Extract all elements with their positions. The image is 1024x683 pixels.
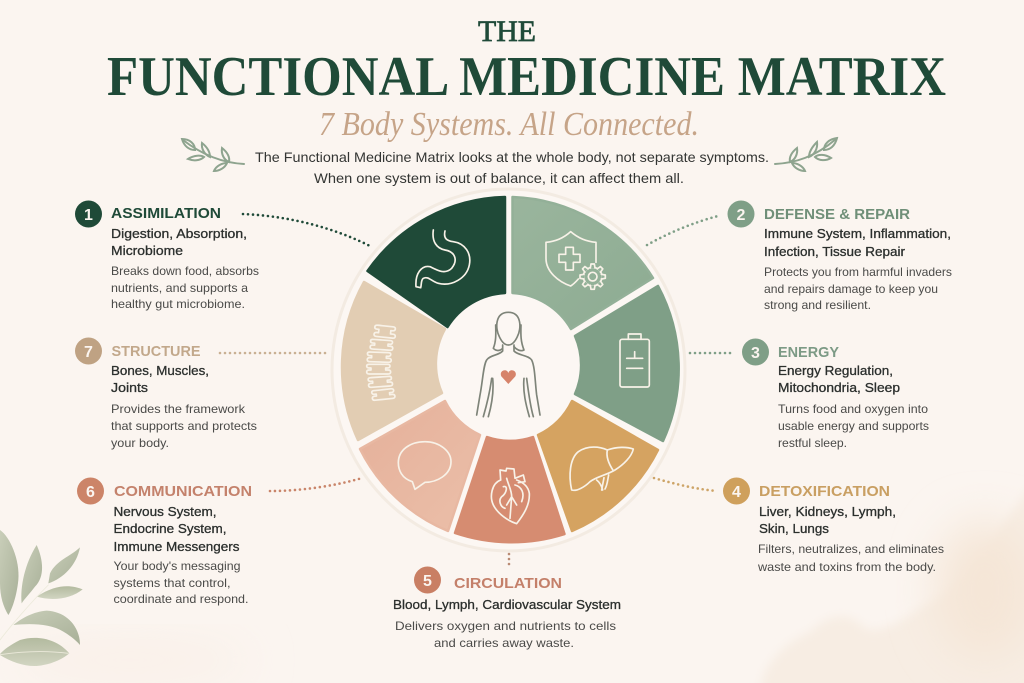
description: Delivers oxygen and nutrients to cells (395, 619, 616, 633)
description: nutrients, and supports a (111, 281, 248, 295)
description: usable energy and supports (778, 419, 929, 433)
title block (107, 15, 946, 186)
segment 3: energy (575, 286, 679, 441)
description (778, 402, 929, 450)
segment 7: structure (342, 282, 445, 440)
segment 2: defense and repair (512, 197, 653, 329)
number badge 3: 3 (751, 345, 760, 362)
description: healthy gut microbiome. (111, 297, 245, 311)
intro text: When one system is out of balance, it can affect them all. (314, 170, 684, 186)
icon: stomach (416, 230, 470, 288)
description: strong and resilient. (764, 298, 871, 312)
panel: 6 communication (77, 478, 252, 606)
body systems: Liver, Kidneys, Lymph, (759, 504, 896, 519)
description: that supports and protects (111, 419, 257, 433)
description: Provides the framework (111, 402, 246, 416)
body systems: Skin, Lungs (759, 521, 830, 536)
icon: anatomical heart (491, 468, 529, 524)
heading: COMMUNICATION (114, 483, 252, 500)
intro text: The Functional Medicine Matrix looks at the whole body, not separate symptoms. (255, 149, 769, 165)
intro text (255, 149, 769, 186)
body systems: Immune Messengers (114, 539, 240, 554)
number badge 2 (728, 200, 754, 228)
body systems (778, 363, 900, 395)
connector: defense and repair (647, 216, 718, 245)
icon: speech bubble (398, 442, 451, 489)
description (757, 542, 944, 574)
connector: structure (220, 352, 330, 354)
panel: 7 structure (75, 338, 257, 450)
heading: STRUCTURE (112, 343, 200, 360)
center figure: woman with heart (477, 312, 540, 417)
outer ring (332, 189, 685, 551)
description (114, 559, 248, 606)
segment 6: communication (360, 401, 480, 531)
panel: 5 circulation (393, 566, 621, 650)
connector: assimilation (243, 214, 372, 247)
body systems (111, 363, 209, 395)
body systems: Digestion, Absorption, (111, 226, 247, 241)
segment 5: circulation (455, 437, 564, 542)
description: Your body's messaging (114, 559, 240, 573)
description (764, 265, 952, 312)
body systems: Joints (111, 380, 149, 395)
panel: 4 detoxification (723, 478, 944, 574)
icon: left laurel sprig (182, 139, 244, 171)
icon: right laurel sprig (775, 138, 837, 171)
number badge 7 (75, 338, 102, 364)
body systems: Energy Regulation, (778, 363, 893, 378)
description (395, 619, 616, 650)
segment 1: assimilation (368, 197, 505, 327)
botanical leaves (0, 530, 83, 666)
connector: circulation (508, 554, 510, 568)
number badge 7: 7 (84, 344, 93, 361)
heading: ENERGY (778, 344, 839, 361)
body systems: Nervous System, (114, 504, 216, 519)
number badge 5 (414, 566, 441, 594)
body systems: Mitochondria, Sleep (778, 380, 900, 395)
description: Turns food and oxygen into (778, 402, 928, 416)
wheel diagram (332, 189, 685, 551)
icons layer (367, 230, 649, 524)
number badge 4 (723, 478, 750, 504)
icon: shield with cross and gear (546, 232, 605, 289)
connector: detoxification (654, 478, 717, 491)
number badge 6: 6 (86, 484, 95, 501)
description: Filters, neutralizes, and eliminates (758, 542, 944, 556)
description: restful sleep. (778, 436, 847, 450)
description: Protects you from harmful invaders (764, 265, 952, 279)
heading: DEFENSE & REPAIR (764, 206, 910, 223)
number badge 5: 5 (423, 573, 432, 590)
description: and carries away waste. (434, 636, 574, 650)
description: your body. (111, 436, 169, 450)
description: systems that control, (114, 576, 230, 590)
heading: THE: THE (478, 15, 536, 48)
number badge 1 (75, 200, 102, 228)
number badge 1: 1 (84, 207, 93, 224)
body systems: Microbiome (111, 243, 183, 258)
number badge 6 (77, 478, 104, 504)
icon: battery (620, 334, 649, 387)
body systems (764, 226, 951, 259)
description: waste and toxins from the body. (757, 560, 936, 574)
body systems: Bones, Muscles, (111, 363, 209, 378)
body systems: Endocrine System, (114, 521, 226, 536)
heading: CIRCULATION (454, 575, 562, 592)
body systems (759, 504, 896, 536)
description (111, 402, 257, 450)
icon: liver (570, 447, 633, 490)
panel: 1 assimilation (75, 200, 259, 311)
number badge 3 (742, 338, 769, 366)
description: coordinate and respond. (114, 592, 248, 606)
panel: 3 energy (742, 338, 929, 450)
panel: 2 defense and repair (728, 200, 952, 312)
body systems: Infection, Tissue Repair (764, 244, 906, 259)
description (111, 264, 259, 311)
body systems: Immune System, Inflammation, (764, 226, 951, 241)
heading: ASSIMILATION (111, 205, 221, 222)
heading: Functional Medicine Matrix: FUNCTIONAL MEDICINE MATRIX (107, 46, 946, 108)
subtitle: 7 Body Systems. All Connected. (319, 106, 699, 143)
icon: heart (501, 370, 516, 384)
body systems (114, 504, 240, 554)
connector: communication (270, 478, 362, 491)
heading: DETOXIFICATION (759, 483, 890, 500)
description: Breaks down food, absorbs (111, 264, 259, 278)
body systems (111, 226, 247, 258)
description: and repairs damage to keep you (764, 282, 938, 296)
segment 4: detoxification (538, 401, 658, 531)
number badge 4: 4 (732, 484, 741, 501)
number badge 2: 2 (737, 207, 746, 224)
body systems: Blood, Lymph, Cardiovascular System (393, 597, 621, 612)
connector: energy (690, 352, 733, 354)
icon: spine (367, 325, 396, 400)
